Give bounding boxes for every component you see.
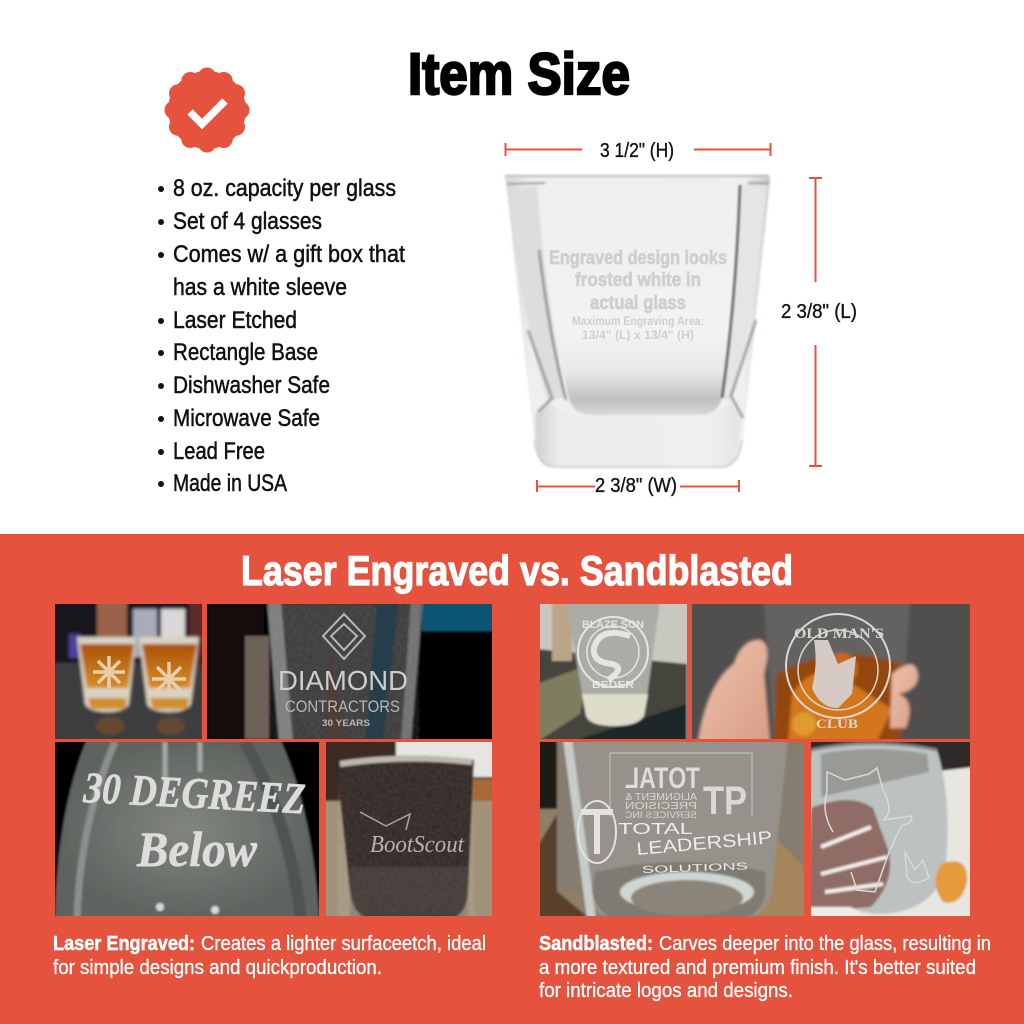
engraved design note: Engraved design looks: [549, 248, 727, 269]
photo: cat design stemless wine glass: [811, 742, 970, 916]
feature list: has a white sleeve: [173, 274, 347, 301]
panel: laser engraved vs sandblasted: [0, 534, 1024, 1024]
dimension: top width: 3 1/2" (H): [600, 140, 674, 162]
heading: Laser Engraved vs. Sandblasted: [241, 547, 793, 594]
photo: dragon logo shot glass: [540, 604, 687, 739]
photo: total leadership glass: PRECISION: [625, 801, 697, 812]
photo: diamond contractors pint glass: [207, 604, 492, 739]
photo: diamond contractors pint glass: CONTRACTORS: [285, 697, 400, 716]
dimension: height: [781, 178, 857, 466]
feature list: Made in USA: [173, 470, 287, 497]
caption: sandblasted: [539, 933, 991, 1002]
photo: total leadership glass: ALIGNMENT &: [625, 792, 697, 803]
feature list: 8 oz. capacity per glass: [173, 175, 396, 202]
photo: old man's club glass in hand: [692, 604, 970, 739]
dimension: height: 2 3/8" (L): [781, 301, 857, 323]
photo: total leadership glass: TOTAL: [625, 762, 700, 795]
feature list: Lead Free: [173, 438, 265, 465]
caption: sandblasted: Carves deeper into the glass, resulting in: [659, 933, 991, 955]
photo: old man's club glass in hand: CLUB: [816, 716, 858, 731]
caption: sandblasted: a more textured and premium finish. It's better suited: [539, 957, 976, 979]
photo: 30 degrees below glass: [55, 742, 319, 916]
photo: total leadership glass: LEADERSHIP: [636, 827, 773, 859]
engraved design note: [549, 248, 727, 342]
engraved design note: 13/4" (L) x 13/4" (H): [582, 328, 694, 342]
feature list: [158, 175, 405, 497]
feature list: Rectangle Base: [173, 339, 318, 366]
photo: dragon logo shot glass: BLAZE SON: [582, 619, 644, 631]
caption: laser engraved: [53, 933, 486, 979]
photo: diamond contractors pint glass: 30 YEARS: [322, 718, 370, 728]
photo: amber shot glasses: [55, 604, 202, 739]
title: Item Size: [408, 42, 630, 107]
feature list: Dishwasher Safe: [173, 372, 330, 399]
photo: total leadership glass: [540, 742, 804, 916]
feature list: Microwave Safe: [173, 405, 320, 432]
photo: dragon logo shot glass: BEDER: [592, 680, 635, 691]
photo: boot scoot dark drink glass: [326, 742, 492, 916]
engraved design note: actual glass: [590, 293, 686, 314]
photo: old man's club glass in hand: OLD MAN'S: [794, 626, 884, 642]
caption: laser engraved: Creates a lighter surfaceetch, ideal: [201, 933, 486, 955]
photo: total leadership glass: TOTAL: [618, 821, 693, 838]
dimension: top width: [505, 140, 771, 162]
photo: diamond contractors pint glass: DIAMOND: [278, 665, 408, 696]
caption: laser engraved: Laser Engraved:: [53, 933, 195, 955]
caption: sandblasted: Sandblasted:: [539, 933, 653, 955]
dimension: bottom width: 2 3/8" (W): [595, 475, 677, 497]
photo: total leadership glass: SERVICES INC: [624, 810, 697, 820]
feature list: Laser Etched: [173, 307, 297, 334]
glass illustration: [505, 175, 770, 467]
dimension: bottom width: [537, 475, 739, 497]
engraved design note: Maximum Engraving Area:: [572, 314, 704, 328]
photo: boot scoot dark drink glass: BootScout: [370, 832, 465, 858]
feature list: Comes w/ a gift box that: [173, 241, 405, 268]
icon: check badge: [164, 68, 250, 152]
feature list: Set of 4 glasses: [173, 208, 322, 235]
photo: 30 degrees below glass: Below: [136, 821, 258, 877]
caption: laser engraved: for simple designs and quickproduction.: [53, 957, 382, 979]
engraved design note: frosted white in: [575, 270, 701, 291]
photo: total leadership glass: SOLUTIONS: [642, 861, 749, 876]
photo: total leadership glass: TP: [703, 779, 747, 823]
caption: sandblasted: for intricate logos and designs.: [539, 980, 793, 1002]
